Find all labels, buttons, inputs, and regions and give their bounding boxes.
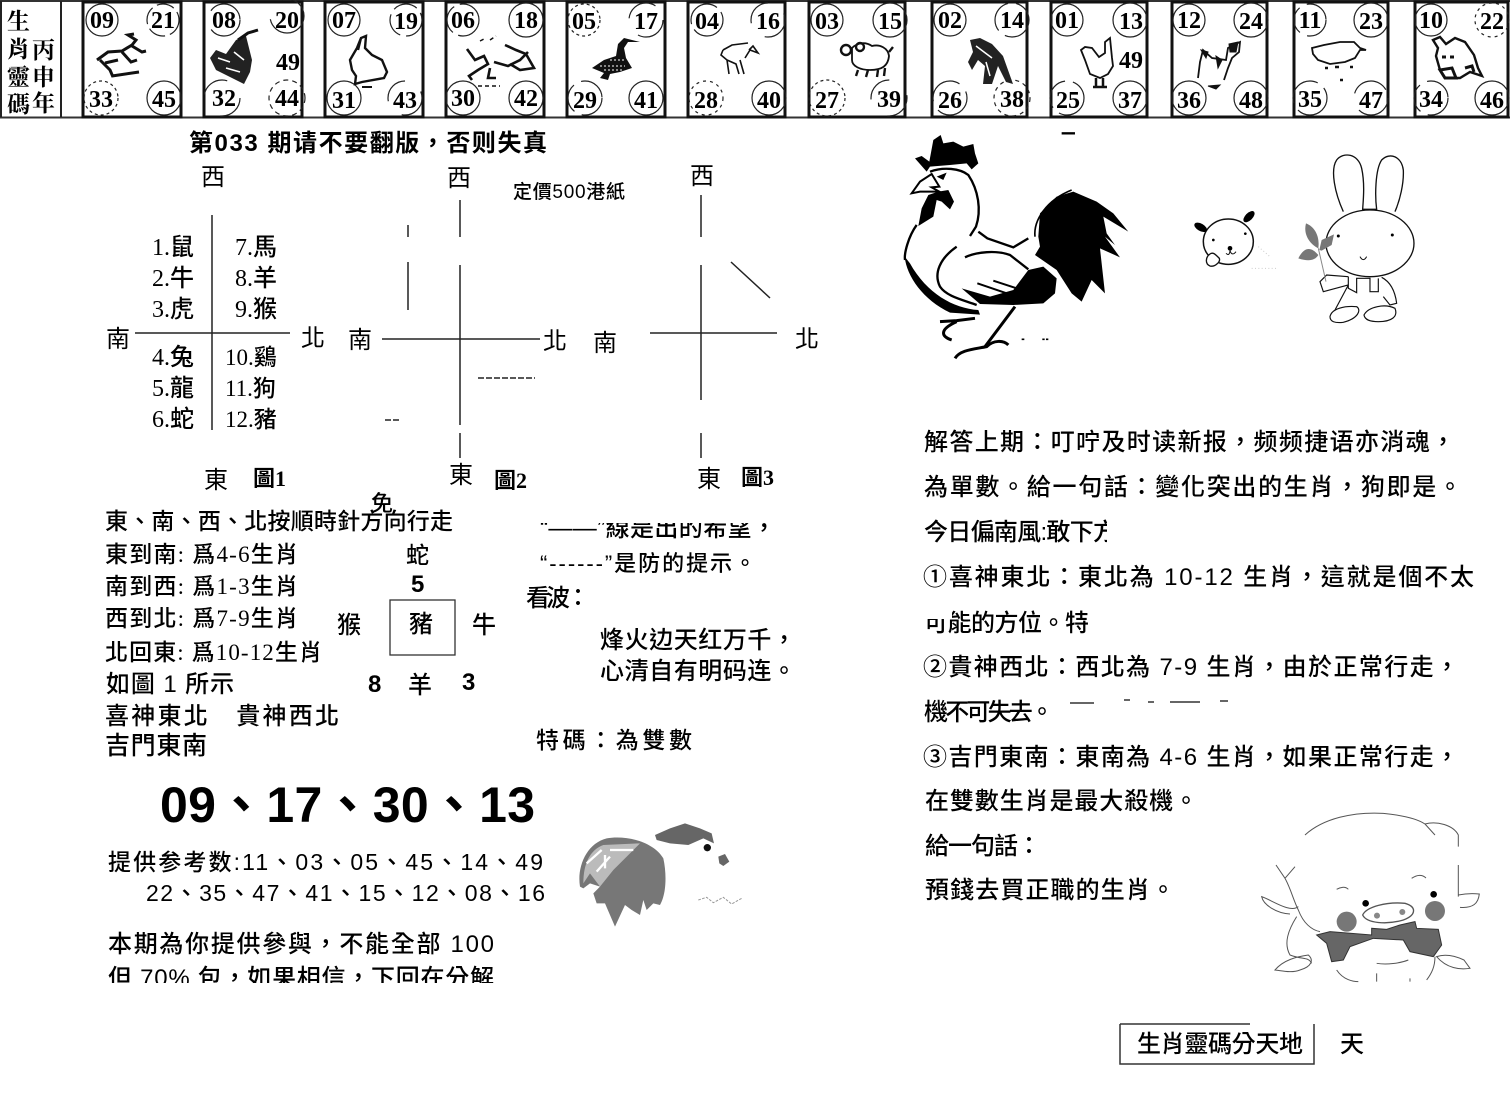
- zodiac cross with pig box: [337, 491, 496, 699]
- cell: 01 13 25 37 49: 01: [1055, 8, 1079, 34]
- cell: 11 23 35 47: 11: [1299, 8, 1321, 34]
- cell: 09 21 33 45: 09: [90, 8, 114, 34]
- diagram 3: compass: 西: [690, 163, 714, 190]
- zodiac list: [152, 234, 277, 433]
- text block: answer and analysis: 可能的方位。特: [924, 610, 1089, 637]
- icon: small bear: [1193, 209, 1278, 268]
- text block: direction rules: 東到南: 爲4-6生肖: [105, 542, 298, 567]
- cell: 04 16 28 40: 04: [695, 9, 719, 35]
- text block: direction rules: 如圖 1 所示: [106, 671, 234, 698]
- cell: 07 19 31 43: 19: [394, 9, 418, 35]
- zodiac cross with pig box: 蛇: [406, 542, 429, 568]
- zodiac cross with pig box: 8: [368, 671, 381, 698]
- zodiac list: 11.狗: [225, 376, 276, 401]
- zodiac cross with pig box: 3: [462, 669, 475, 696]
- cell: 02 14 26 38: 38: [1000, 87, 1024, 113]
- text block: answer and analysis: 預錢去買正職的生肖。: [925, 877, 1175, 904]
- text block: line legend and poem: “------”是防的提示。: [540, 551, 756, 576]
- icon: pig: [1262, 813, 1479, 982]
- text block: answer and analysis: 為單數。給一句話：變化突出的生肖，狗即是。: [924, 474, 1462, 501]
- text block: line legend and poem: 看波：: [526, 585, 590, 612]
- cell: 01 13 25 37 49: 49: [1119, 48, 1143, 74]
- crop mask: analysis lines: [1107, 515, 1137, 545]
- zodiac list: 2.牛: [152, 265, 194, 292]
- diagram 2: compass: [348, 165, 567, 493]
- zodiac cross with pig box: 牛: [472, 612, 496, 639]
- reference numbers: 提供参考数:11、03、05、45、14、49: [108, 849, 543, 875]
- icon: grey rooster: [579, 823, 742, 927]
- cell: 03 15 27 39: 03: [815, 9, 839, 35]
- note paragraph: 本期為你提供參與，不能全部 100: [108, 931, 494, 958]
- zodiac list: 7.馬: [235, 235, 277, 261]
- cell: 01 13 25 37 49: 25: [1056, 88, 1080, 114]
- text block: direction rules: 南到西: 爲1-3生肖: [105, 574, 298, 599]
- text block: answer and analysis: 解答上期：叮咛及时读新报，频频捷语亦消魂，: [924, 429, 1455, 456]
- cell: 06 18 30 42: 18: [514, 8, 538, 34]
- cell: 04 16 28 40: [688, 2, 786, 117]
- zodiac cross with pig box: 5: [411, 571, 424, 598]
- diagram 1: compass: [106, 164, 325, 494]
- text block: line legend and poem: 烽火边天红万千，: [600, 627, 796, 654]
- strip label: 生肖靈碼 丙申年: 碼: [7, 92, 30, 117]
- cell: 12 24 36 48: 36: [1177, 88, 1201, 114]
- text block: answer and analysis: [923, 429, 1474, 904]
- cell: 03 15 27 39: [809, 2, 907, 117]
- panel: zodiac number strip: [0, 0, 1510, 118]
- cell: 05 17 29 41: 17: [634, 9, 658, 35]
- strip label: 生肖靈碼 丙申年: 生: [7, 9, 30, 34]
- cell: 07 19 31 43: 07: [332, 8, 356, 34]
- cell: 10 22 34 46: 22: [1480, 9, 1504, 35]
- zodiac cross with pig box: 猴: [337, 612, 361, 639]
- strip label: 生肖靈碼 丙申年: 肖: [7, 37, 30, 62]
- cell: 04 16 28 40: 28: [694, 88, 718, 114]
- cell: 08 20 32 44 49: 20: [275, 8, 299, 34]
- reference numbers: 22、35、47、41、15、12、08、16: [146, 880, 545, 906]
- cell: 03 15 27 39: 39: [877, 87, 901, 113]
- cell: 05 17 29 41: 05: [572, 9, 596, 35]
- text block: answer and analysis: 給一句話：: [925, 833, 1041, 860]
- cell: 09 21 33 45: 33: [89, 87, 113, 113]
- cell: 06 18 30 42: [446, 2, 544, 117]
- diagram 1: compass: 東: [204, 467, 228, 494]
- text block: answer and analysis: ③吉門東南：東南為 4-6 生肖，如果正常行走，: [923, 744, 1459, 771]
- cell: 04 16 28 40: 16: [756, 9, 780, 35]
- cell: 08 20 32 44 49: 44: [275, 86, 299, 112]
- cell: 02 14 26 38: 26: [938, 88, 962, 114]
- text block: line legend and poem: 心清自有明码连。: [600, 658, 796, 685]
- text block: direction rules: 東、南、西、北按順時針方向行走: [105, 509, 453, 534]
- diagram 1: compass: 北: [301, 325, 325, 352]
- cell: 10 22 34 46: 10: [1419, 8, 1443, 34]
- cell: 07 19 31 43: [325, 2, 423, 117]
- strip label: 生肖靈碼 丙申年: 申: [32, 65, 55, 90]
- cell: 09 21 33 45: 21: [151, 8, 175, 34]
- cell: 08 20 32 44 49: 32: [212, 86, 236, 112]
- cell: 06 18 30 42: 30: [451, 86, 475, 112]
- cell: 09 21 33 45: 45: [152, 87, 176, 113]
- zodiac list: 8.羊: [235, 265, 277, 292]
- footer brand box: 天: [1340, 1031, 1364, 1058]
- note paragraph: 但 70% 包，如果相信，下回在分解: [108, 965, 494, 992]
- zodiac list: 6.蛇: [152, 406, 194, 433]
- cell: 01 13 25 37 49: 37: [1118, 88, 1142, 114]
- cell: 05 17 29 41: 41: [634, 88, 658, 114]
- strip label: 生肖靈碼 丙申年: 靈: [7, 64, 30, 90]
- cell: 10 22 34 46: 46: [1480, 88, 1504, 114]
- zodiac list: 4.兔: [152, 344, 194, 371]
- zodiac list: 9.猴: [235, 296, 277, 323]
- text block: answer and analysis: 在雙數生肖是最大殺機。: [925, 788, 1198, 815]
- text block: direction rules: 北回東: 爲10-12生肖: [105, 640, 322, 665]
- text block: direction rules: 吉門東南: [105, 732, 207, 760]
- text block: direction rules: 西到北: 爲7-9生肖: [105, 606, 298, 631]
- cell: 10 22 34 46: [1414, 2, 1509, 117]
- diagram 2: compass: 南: [348, 327, 372, 354]
- cell: 11 23 35 47: [1293, 2, 1388, 117]
- text block: answer and analysis: 機不可失去。: [924, 699, 1054, 726]
- text block: direction rules: [105, 509, 453, 760]
- period header: 第033 期请不要翻版，否则失真: [189, 130, 547, 157]
- cell: 08 20 32 44 49: [204, 0, 305, 117]
- note paragraph: [108, 931, 494, 992]
- diagram 2: compass: 北: [543, 328, 567, 355]
- cell: 07 19 31 43: 43: [393, 88, 417, 114]
- text block: line legend and poem: 特碼：為雙數: [536, 727, 692, 753]
- cell: 05 17 29 41: [567, 2, 665, 117]
- text block: line legend and poem: [526, 515, 796, 753]
- cell: 06 18 30 42: 06: [451, 8, 475, 34]
- footer brand box: 生肖靈碼分天地: [1137, 1031, 1303, 1058]
- diagram 3: compass: 南: [593, 330, 617, 357]
- zodiac cross with pig box: 免: [371, 491, 393, 516]
- zodiac list: 5.龍: [152, 375, 194, 402]
- icon: large rooster: [905, 133, 1128, 358]
- cell: 03 15 27 39: 27: [815, 88, 839, 114]
- price note: 定價500港紙: [513, 181, 625, 203]
- text block: answer and analysis: ②貴神西北：西北為 7-9 生肖，由於正常行走，: [923, 654, 1459, 681]
- zodiac list: 1.鼠: [152, 234, 194, 261]
- diagram 1: compass: 西: [201, 164, 225, 191]
- icon: bunny with leaf: [1298, 155, 1414, 323]
- cell: 08 20 32 44 49: 08: [212, 8, 236, 34]
- cell: 11 23 35 47: 23: [1359, 9, 1383, 35]
- footer brand box: [1120, 1024, 1364, 1064]
- diagram 3: compass: 北: [795, 326, 819, 353]
- cell: 12 24 36 48: 12: [1177, 8, 1201, 34]
- zodiac list: 12.豬: [225, 407, 277, 432]
- text block: answer and analysis: 今日偏南風:敢下方: [924, 519, 1117, 546]
- zodiac list: 10.鷄: [225, 345, 277, 370]
- diagram 2: compass: 西: [447, 165, 471, 192]
- cell: 05 17 29 41: 29: [573, 88, 597, 114]
- strip label: 生肖靈碼 丙申年: 年: [32, 90, 55, 116]
- diagram 2: compass: 圖2: [494, 468, 527, 493]
- zodiac cross with pig box: 豬: [409, 611, 433, 638]
- cell: 12 24 36 48: 48: [1239, 88, 1263, 114]
- text block: direction rules: 喜神東北 貴神西北: [105, 703, 339, 730]
- text block: answer and analysis: ①喜神東北：東北為 10-12 生肖，這就是個不太: [923, 564, 1474, 591]
- crop mask: note paragraph: [100, 983, 500, 997]
- diagram 1: compass: 圖1: [253, 466, 286, 491]
- cell: 09 21 33 45: [83, 2, 181, 117]
- cell: 12 24 36 48: [1172, 2, 1268, 117]
- cell: 08 20 32 44 49: 49: [276, 50, 300, 76]
- cell: 02 14 26 38: 14: [1000, 8, 1024, 34]
- diagram 2: compass: 東: [449, 462, 473, 489]
- cell: 02 14 26 38: [932, 2, 1030, 117]
- cell: 01 13 25 37 49: 13: [1119, 9, 1143, 35]
- diagram 3: compass: 東: [697, 466, 721, 493]
- cell: 12 24 36 48: 24: [1239, 9, 1263, 35]
- cell: 02 14 26 38: 02: [938, 8, 962, 34]
- strip label: 生肖靈碼 丙申年: 丙: [32, 38, 55, 63]
- cell: 10 22 34 46: 34: [1419, 87, 1443, 113]
- diagram 3: compass: [593, 163, 819, 493]
- cell: 11 23 35 47: 35: [1298, 87, 1322, 113]
- strip label: 生肖靈碼 丙申年: [7, 9, 55, 117]
- cell: 01 13 25 37 49: [1050, 2, 1147, 117]
- key numbers: 09、17、30、13: [160, 777, 535, 833]
- crop mask: top of legend line: [530, 505, 790, 523]
- zodiac list: 3.虎: [152, 296, 194, 323]
- text block: line legend and poem: “——”線是出的希望，: [540, 515, 776, 542]
- cell: 11 23 35 47: 47: [1359, 88, 1383, 114]
- diagram 3: compass: 圖3: [741, 465, 774, 490]
- cell: 04 16 28 40: 40: [757, 88, 781, 114]
- diagram 1: compass: 南: [106, 326, 130, 353]
- cell: 03 15 27 39: 15: [878, 9, 902, 35]
- cell: 06 18 30 42: 42: [514, 86, 538, 112]
- zodiac cross with pig box: 羊: [408, 672, 432, 699]
- cell: 07 19 31 43: 31: [332, 88, 356, 114]
- reference numbers: [108, 849, 545, 906]
